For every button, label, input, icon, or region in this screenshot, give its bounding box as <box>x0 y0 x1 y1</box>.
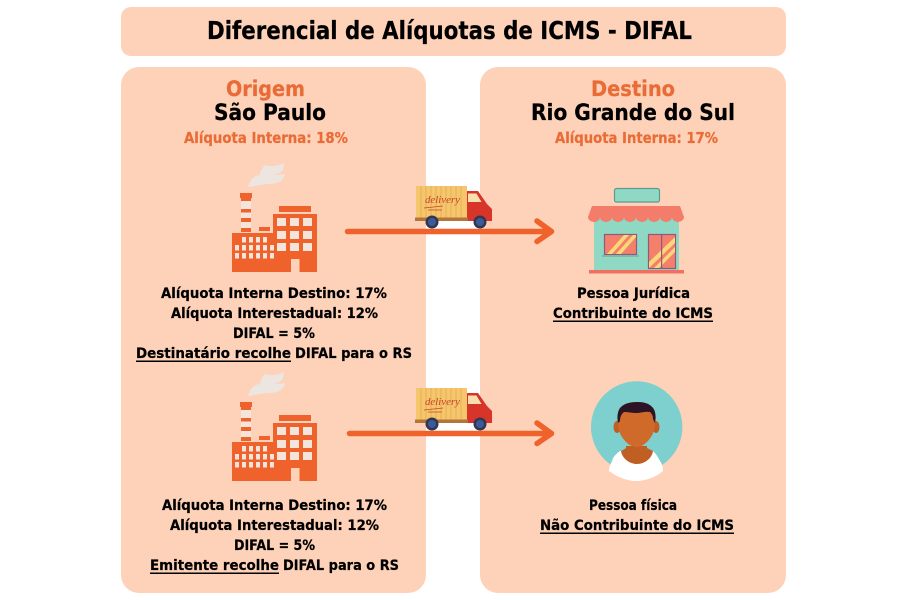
text block: pessoa física: Pessoa física <box>589 498 677 514</box>
text block: condições contribuinte: Alíquota Interna Destino: 17% <box>161 286 387 302</box>
text block: condições não contribuinte: DIFAL para o RS <box>283 558 399 574</box>
icon: factory top <box>232 163 317 272</box>
text block: condições não contribuinte: Alíquota Interna Destino: 17% <box>162 498 387 514</box>
text block: condições não contribuinte: Alíquota Interestadual: 12% <box>170 518 379 534</box>
text block: condições contribuinte: Alíquota Interestadual: 12% <box>171 306 378 322</box>
heading: origem: Origem <box>226 77 305 101</box>
arrow: top <box>348 221 552 242</box>
text block: condições contribuinte: Destinatário recolhe <box>136 346 291 362</box>
title banner: Diferencial de Alíquotas de ICMS - DIFAL <box>207 16 692 45</box>
icon: truck bottom <box>415 388 492 430</box>
text block: pessoa jurídica <box>553 286 713 322</box>
text block: condições contribuinte <box>136 286 412 362</box>
heading: Rio Grande do Sul: Rio Grande do Sul <box>531 101 735 126</box>
text block: condições não contribuinte: Emitente recolhe <box>150 558 279 574</box>
title banner <box>121 7 786 56</box>
text block: pessoa jurídica: Pessoa Jurídica <box>577 286 690 302</box>
text block: condições contribuinte: DIFAL para o RS <box>295 346 412 362</box>
heading: São Paulo: São Paulo <box>214 101 326 126</box>
panel: origem <box>121 67 426 593</box>
icon: truck top <box>415 186 492 228</box>
text block: pessoa física: Não Contribuinte do ICMS <box>540 518 734 534</box>
icon: store <box>588 188 684 274</box>
text: alíquota interna destino: Alíquota Interna: 17% <box>555 129 718 147</box>
text block: condições não contribuinte: DIFAL = 5% <box>234 538 315 554</box>
arrow: bottom <box>350 423 552 444</box>
panel: destino <box>480 67 786 593</box>
icon: factory bottom <box>232 372 317 481</box>
text block: condições não contribuinte <box>150 498 399 574</box>
heading: destino: Destino <box>591 77 675 101</box>
text block: pessoa física <box>540 498 734 534</box>
text block: condições contribuinte: DIFAL = 5% <box>233 326 315 342</box>
text block: pessoa jurídica: Contribuinte do ICMS <box>553 306 713 322</box>
icon: truck top: delivery <box>425 195 461 206</box>
icon: person avatar <box>591 381 682 481</box>
icon: truck bottom: delivery <box>425 397 461 408</box>
text: alíquota interna origem: Alíquota Interna: 18% <box>184 129 348 147</box>
